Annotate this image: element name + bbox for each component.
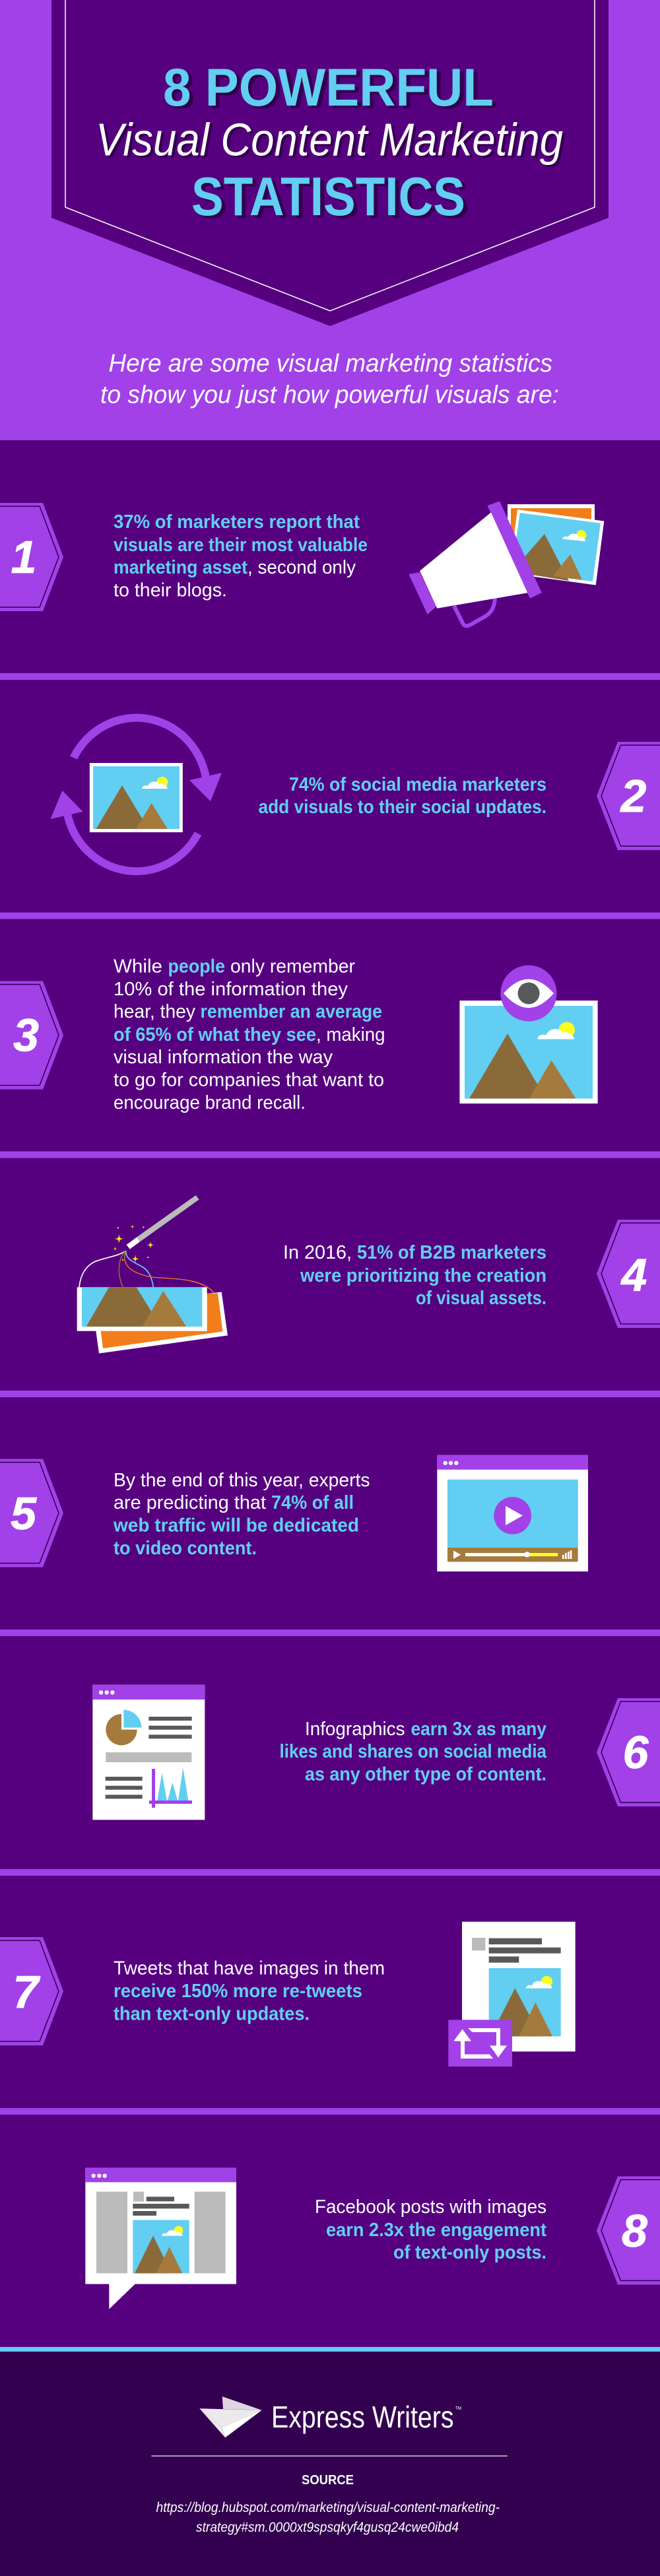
- source url: https://blog.hubspot.com/marketing/visual-content-marketing-: [156, 2500, 500, 2515]
- statistic 3 text: people: [168, 956, 225, 977]
- intro text: Here are some visual marketing statistics: [108, 350, 552, 378]
- statistic 8 text: of text-only posts.: [393, 2242, 546, 2263]
- icon: tweet card with retweet symbol: [448, 1922, 576, 2066]
- statistic 7 text: [114, 1958, 385, 2025]
- statistic 4 text: were prioritizing the creation: [300, 1265, 546, 1286]
- stats background: [0, 440, 660, 2347]
- panel: statistic 3: [0, 956, 598, 1113]
- panel: statistic 1: [0, 501, 604, 626]
- statistic 3 text: , making: [316, 1024, 385, 1045]
- statistic 2 text: add visuals to their social updates.: [259, 797, 546, 818]
- footer background: [0, 2352, 660, 2576]
- source url: [156, 2500, 500, 2535]
- statistic 5 text: to video content.: [114, 1538, 257, 1559]
- number badge 6: [597, 1698, 660, 1806]
- number badge 4: [597, 1220, 660, 1328]
- title: 8 POWERFUL: [163, 58, 494, 117]
- title: STATISTICS: [191, 166, 465, 227]
- statistic 4 text: of visual assets.: [416, 1288, 546, 1309]
- title: [96, 58, 566, 230]
- statistic 8 text: [315, 2196, 546, 2263]
- statistic 3 text: visual information the way: [114, 1047, 333, 1068]
- number badge 2: [597, 742, 660, 850]
- title: Visual Content Marketing: [96, 114, 563, 165]
- number badge 8: [597, 2177, 660, 2285]
- statistic 5 text: [113, 1470, 370, 1559]
- statistic 5 text: are predicting that: [114, 1492, 266, 1513]
- number badge 2: 2: [620, 770, 647, 822]
- statistic 6 text: Infographics: [305, 1719, 405, 1740]
- statistic 3 text: hear, they: [114, 1001, 195, 1022]
- statistic 3 text: remember an average: [201, 1001, 382, 1022]
- statistic 8 text: Facebook posts with images: [315, 2196, 546, 2218]
- number badge 7: [0, 1937, 63, 2045]
- statistic 4 text: 51% of B2B marketers: [357, 1242, 546, 1263]
- statistic 6 text: likes and shares on social media: [280, 1741, 547, 1762]
- statistic 1 text: 37% of marketers report that: [114, 512, 360, 533]
- number badge 7: 7: [13, 1966, 41, 2018]
- number badge 3: [0, 981, 63, 1089]
- icon: eye over picture: [459, 965, 598, 1104]
- statistic 6 text: as any other type of content.: [305, 1764, 546, 1785]
- number badge 5: [0, 1459, 63, 1567]
- number badge 8: 8: [622, 2205, 647, 2257]
- number badge 1: [0, 503, 63, 611]
- intro text: [100, 350, 559, 409]
- statistic 7 text: than text-only updates.: [114, 2004, 310, 2025]
- number badge 4: 4: [620, 1249, 647, 1300]
- title: 8 POWERFUL: [167, 61, 498, 120]
- statistic 3 text: While: [114, 956, 162, 977]
- footer logo: Express Writers: [199, 2396, 461, 2437]
- icon: video player window: [437, 1455, 588, 1571]
- statistic 7 text: Tweets that have images in them: [114, 1958, 385, 1979]
- statistic 8 text: earn 2.3x the engagement: [326, 2220, 546, 2241]
- icon: megaphone with photos: [409, 501, 604, 626]
- icon: refresh arrows with picture: [50, 718, 222, 871]
- number badge 1: 1: [11, 531, 36, 583]
- number badge 6: 6: [623, 1727, 649, 1778]
- intro text: to show you just how powerful visuals are:: [100, 381, 559, 409]
- statistic 6 text: [280, 1719, 547, 1785]
- footer logo: Express Writers: TM: [455, 2406, 461, 2411]
- statistic 2 text: [259, 774, 546, 818]
- title: STATISTICS: [195, 168, 469, 230]
- panel: statistic 4: [77, 1195, 660, 1354]
- footer logo: Express Writers: Express Writers: [271, 2400, 454, 2434]
- statistic 3 text: [114, 956, 385, 1113]
- panel: statistic 8: [85, 2168, 660, 2309]
- panel: statistic 5: [0, 1455, 588, 1571]
- statistic 7 text: receive 150% more re-tweets: [114, 1981, 362, 2002]
- statistic 1 text: , second only: [248, 557, 356, 578]
- statistic 3 text: encourage brand recall.: [114, 1092, 306, 1113]
- number badge 5: 5: [11, 1488, 37, 1539]
- statistic 5 text: 74% of all: [271, 1492, 354, 1513]
- statistic 1 text: to their blogs.: [114, 579, 227, 601]
- statistic 1 text: [114, 512, 368, 601]
- statistic 2 text: 74% of social media marketers: [289, 774, 546, 795]
- title: Visual Content Marketing: [98, 116, 566, 168]
- icon: facebook post speech bubble: [85, 2168, 236, 2309]
- header background: [0, 0, 660, 440]
- statistic 3 text: 10% of the information they: [114, 979, 348, 1000]
- statistic 4 text: [283, 1242, 546, 1309]
- panel: statistic 2: [50, 718, 660, 871]
- source heading: SOURCE: [302, 2472, 354, 2488]
- icon: magic brush painting picture: [77, 1195, 228, 1354]
- statistic 1 text: visuals are their most valuable: [114, 535, 368, 556]
- statistic 3 text: to go for companies that want to: [114, 1069, 384, 1090]
- statistic 4 text: In 2016,: [283, 1242, 352, 1263]
- source url: strategy#sm.0000xt9spsqkyf4gusq24cwe0ibd4: [196, 2520, 459, 2535]
- statistic 5 text: web traffic will be dedicated: [113, 1515, 359, 1536]
- statistic 1 text: marketing asset: [114, 557, 248, 578]
- title banner: [51, 0, 609, 326]
- statistic 6 text: earn 3x as many: [411, 1719, 546, 1740]
- statistic 5 text: By the end of this year, experts: [114, 1470, 370, 1491]
- number badge 3: 3: [13, 1010, 39, 1061]
- statistic 3 text: of 65% of what they see: [114, 1024, 316, 1045]
- icon: infographic document: [92, 1685, 205, 1820]
- statistic 3 text: only remember: [230, 956, 355, 977]
- panel: statistic 7: [0, 1922, 576, 2066]
- panel: statistic 6: [92, 1685, 660, 1820]
